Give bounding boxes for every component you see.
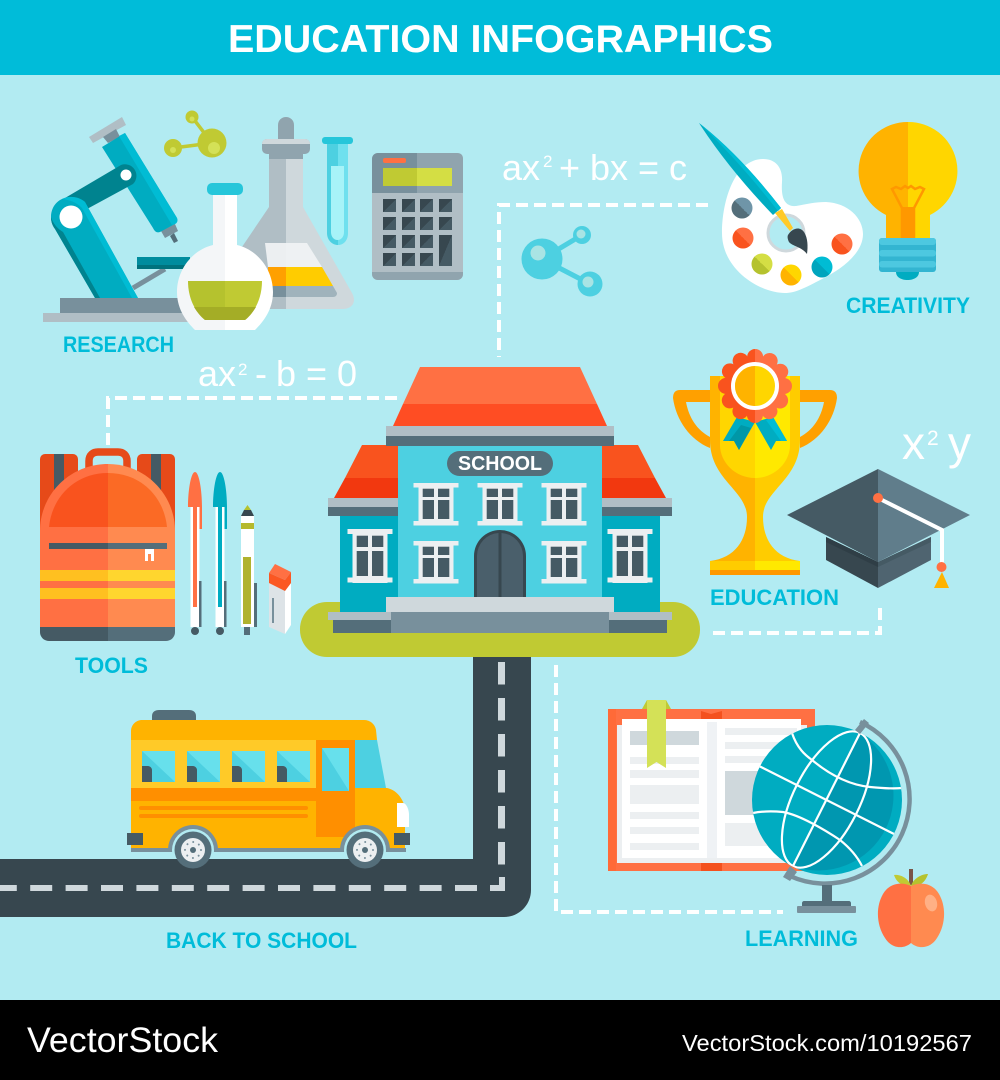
formula: ax2 - b = 0: - [255, 353, 267, 394]
road [0, 657, 531, 917]
icon: trophy [673, 376, 837, 575]
label: learning: LEARNING [745, 926, 858, 951]
footer bar [0, 1000, 1000, 1080]
label: research: RESEARCH [63, 332, 174, 357]
main roof [393, 367, 607, 426]
icon: front wheel [346, 832, 384, 868]
formula: x2 y: y [948, 417, 971, 469]
icon: calculator [372, 153, 463, 280]
green ground [300, 602, 700, 657]
icon: test tube [322, 137, 353, 245]
windows [348, 483, 652, 584]
panel: back to school [127, 710, 410, 953]
icon: blue molecule [522, 226, 602, 296]
icon: school bus [127, 710, 410, 852]
school sign: SCHOOL [458, 453, 542, 475]
panel: learning [608, 700, 944, 951]
icon: backpack [40, 452, 175, 641]
label: back to school: BACK TO SCHOOL [166, 928, 357, 953]
side roofs [334, 445, 666, 498]
panel: research [43, 110, 463, 357]
footer logo text: VectorStock [27, 1021, 219, 1060]
icon: orange pen [188, 472, 202, 635]
dashed connector: formula to school [499, 205, 708, 357]
formula: ax2 + bx = c: bx [590, 147, 628, 188]
icon: olive molecule [164, 110, 226, 158]
formula: ax2 - b = 0: = [306, 353, 327, 394]
icon: globe [752, 718, 910, 913]
icon: open book [608, 700, 815, 871]
formula: ax2 - b = 0: 0 [337, 353, 357, 394]
dashed connector: education [713, 607, 880, 633]
icon: graduation cap [787, 469, 970, 588]
formula: ax2 + bx = c: c [669, 147, 687, 188]
formula: ax2 - b = 0: ax [198, 353, 236, 394]
icon: paint palette [699, 123, 863, 293]
dashed connector: school to tools [108, 398, 397, 445]
formula: x2 y: x [902, 417, 925, 469]
icon: apple [878, 869, 944, 947]
formula: ax2 - b = 0: 2 [238, 360, 247, 379]
formula: ax2 - b = 0: b [276, 353, 296, 394]
steps [328, 597, 672, 633]
icon: light bulb [859, 122, 957, 280]
formula: ax2 + bx = c: 2 [543, 152, 552, 171]
door [474, 530, 526, 598]
icon: erlenmeyer flask [200, 117, 354, 309]
label: tools: TOOLS [75, 653, 148, 678]
icon: rear wheel [174, 832, 212, 868]
icon: round flask [177, 183, 273, 330]
dashed connector: learning [556, 665, 783, 912]
label: creativity: CREATIVITY [846, 293, 970, 318]
side walls [328, 498, 672, 612]
header banner [0, 0, 1000, 75]
footer id text: VectorStock.com/10192567 [682, 1030, 972, 1056]
label: education: EDUCATION [710, 585, 839, 610]
panel: education [673, 357, 970, 610]
panel: school building [300, 367, 700, 657]
main wall [398, 446, 602, 598]
icon: eraser [269, 564, 291, 634]
formula: x2 y: 2 [927, 427, 939, 450]
formula: ax2 + bx = c: ax [502, 147, 540, 188]
icon: marker [241, 505, 257, 635]
icon: microscope [43, 117, 190, 322]
formula: ax2 + bx = c: + [559, 147, 580, 188]
icon: rosette [723, 357, 787, 450]
cornice [386, 426, 614, 446]
formula: ax2 + bx = c: = [638, 147, 659, 188]
title: EDUCATION INFOGRAPHICS [228, 18, 773, 61]
icon: teal pen [213, 472, 227, 635]
panel: tools [40, 452, 291, 678]
panel: creativity [699, 122, 970, 318]
